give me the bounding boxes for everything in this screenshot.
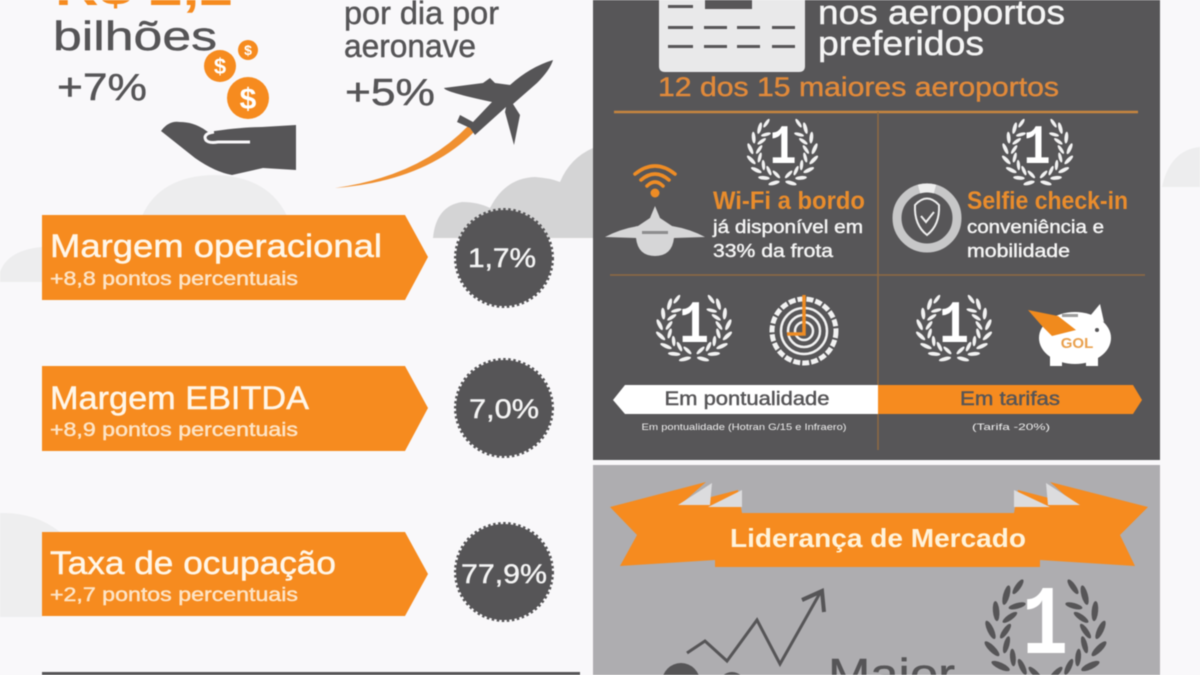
icon: wi-fi xyxy=(635,166,675,198)
icon: clock target xyxy=(772,295,836,363)
banner title: Margem EBITDA xyxy=(50,380,310,416)
label: em tarifas: Em tarifas xyxy=(960,389,1060,410)
award: selfie check-in xyxy=(1001,116,1074,186)
value badge xyxy=(456,524,552,620)
banner subtitle: +8,8 pontos percentuais xyxy=(50,269,298,290)
heading: preferred airports xyxy=(818,0,1065,63)
value badge: 77,9% xyxy=(461,559,547,589)
label: em tarifas xyxy=(878,385,1142,414)
panel background xyxy=(593,0,1160,460)
icon: selfie ring xyxy=(897,188,957,248)
text: wi-fi a bordo: Wi-Fi a bordo xyxy=(713,187,865,215)
icon: coins: $ xyxy=(244,42,252,58)
icon: piggy bank xyxy=(1028,304,1111,366)
icon: departures board xyxy=(659,0,805,72)
award: punctuality: 1 xyxy=(679,293,709,361)
text: wi-fi a bordo: já disponível em xyxy=(712,217,863,237)
panel: airports and services xyxy=(593,0,1160,460)
ribbon title: Liderança de Mercado xyxy=(730,523,1026,553)
value badge: 1,7% xyxy=(468,243,536,273)
icon: people xyxy=(662,663,745,675)
icon: plane with trail xyxy=(335,60,553,188)
icon: piggy bank: GOL xyxy=(1061,335,1093,352)
text: selfie check-in: conveniência e xyxy=(967,217,1104,237)
award: wi-fi: 1 xyxy=(770,116,796,180)
award: wi-fi xyxy=(746,116,819,186)
revenue unit: bilhões xyxy=(53,13,217,59)
metric: margem EBITDA xyxy=(42,360,552,456)
panel background xyxy=(593,465,1160,675)
value badge: 7,0% xyxy=(469,394,539,424)
label: em pontualidade xyxy=(613,385,878,414)
text: selfie check-in: mobilidade xyxy=(967,241,1070,261)
panel: market leadership xyxy=(593,465,1160,675)
utilisation change: +5% xyxy=(345,72,435,114)
metric: taxa de ocupacao xyxy=(42,524,552,620)
icon: coins: $ xyxy=(240,83,257,116)
stat: revenue xyxy=(53,0,233,109)
footnote: tarifas: (Tarifa -20%) xyxy=(972,422,1050,433)
icon: plane front xyxy=(605,206,705,256)
award: market leader xyxy=(983,572,1108,675)
text: selfie check-in: Selfie check-in xyxy=(967,187,1128,215)
revenue change: +7% xyxy=(57,67,147,109)
banner subtitle: +2,7 pontos percentuais xyxy=(50,585,298,606)
text: wi-fi a bordo: 33% da frota xyxy=(713,241,834,261)
metric: margem operacional xyxy=(42,210,552,306)
value badge xyxy=(456,360,552,456)
banner subtitle: +8,9 pontos percentuais xyxy=(50,420,298,441)
ribbon xyxy=(610,482,1148,567)
background clouds xyxy=(0,147,1200,617)
icon: coins xyxy=(204,40,269,119)
label: em pontualidade: Em pontualidade xyxy=(664,389,830,410)
stat: aircraft utilisation xyxy=(344,0,499,114)
award: selfie check-in: 1 xyxy=(1024,116,1050,180)
icon: growth arrow xyxy=(687,591,824,664)
heading: preferred airports: preferidos xyxy=(818,25,984,63)
award: fares xyxy=(915,293,993,362)
text: wi-fi a bordo xyxy=(712,187,865,261)
icon: hand xyxy=(161,122,296,175)
value badge xyxy=(456,210,552,306)
text: selfie check-in xyxy=(967,187,1128,261)
bottom panel edge xyxy=(42,672,580,675)
icon: coins: $ xyxy=(214,54,226,79)
banner xyxy=(42,532,428,616)
banner title: Taxa de ocupação xyxy=(50,545,336,581)
banner xyxy=(42,366,428,451)
banner xyxy=(42,215,428,300)
banner title: Margem operacional xyxy=(50,228,382,264)
footnote: pontualidade: Em pontualidade (Hotran G/15 e Infraero) xyxy=(642,422,846,433)
award: fares: 1 xyxy=(939,293,969,361)
award: punctuality xyxy=(655,293,733,362)
subheading: 12 dos 15 maiores aeroportos xyxy=(658,72,1059,102)
stat: aircraft utilisation: aeronave xyxy=(344,28,476,64)
